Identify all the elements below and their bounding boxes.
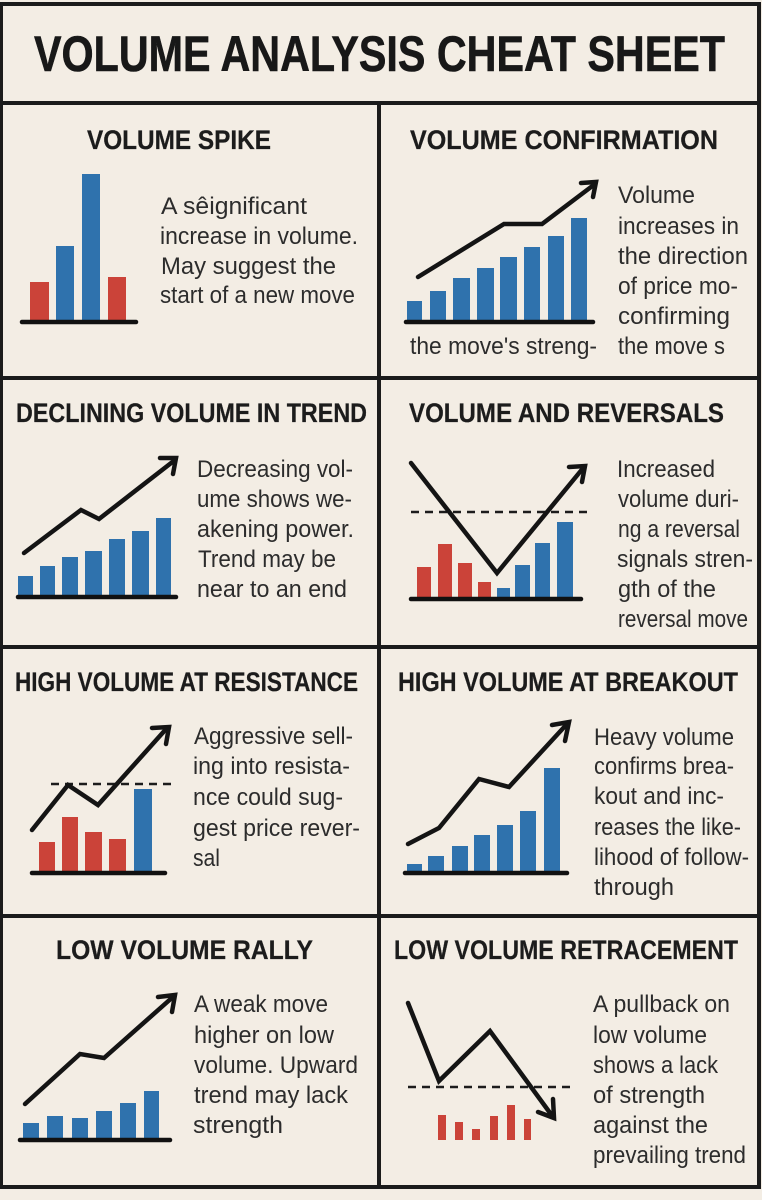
text: resistance description: sal: [193, 845, 220, 872]
text: reversals description: Increased: [617, 456, 715, 483]
text: volume spike description: increase in volume.: [160, 223, 358, 250]
text: retracement description: A pullback on: [593, 991, 730, 1018]
text: declining volume description: ume shows we-: [197, 486, 352, 513]
text: declining volume description: near to an end: [197, 576, 347, 603]
text: breakout description: confirms brea-: [594, 753, 734, 780]
panel: high volume at breakout: [379, 647, 759, 916]
text: low volume rally description: volume. Upward: [194, 1052, 358, 1079]
chart: low volume rally bars and price arrow: [20, 995, 175, 1140]
heading: declining volume in trend: DECLINING VOLUME IN TREND: [16, 398, 367, 428]
heading: volume and reversals: VOLUME AND REVERSALS: [409, 398, 724, 428]
panel: high volume at resistance: [1, 647, 379, 916]
text: volume confirmation description: [618, 182, 748, 360]
panel: volume and reversals: [379, 378, 759, 647]
heading: low volume rally: LOW VOLUME RALLY: [56, 935, 313, 965]
text: resistance description: ing into resista-: [193, 753, 350, 780]
chart: breakout bars and price arrow: [405, 722, 569, 873]
text: volume confirmation description: the direction: [618, 243, 748, 270]
panel: low volume retracement: [379, 916, 759, 1187]
text: volume confirmation description: increases in: [618, 213, 739, 240]
text: breakout description: [594, 724, 749, 901]
chart: declining volume bars and price arrow: [18, 458, 176, 597]
text: volume confirmation description: of price mo-: [618, 273, 738, 300]
text: volume spike description: A sêignificant: [161, 193, 307, 220]
panel: declining volume in trend: [1, 378, 379, 647]
text: volume confirmation description: Volume: [618, 182, 695, 209]
heading: high volume at resistance: HIGH VOLUME AT RESISTANCE: [15, 667, 358, 697]
text: volume spike description: start of a new move: [160, 282, 355, 309]
text: declining volume description: akening power.: [197, 516, 354, 543]
text: low volume rally description: A weak move: [194, 991, 328, 1018]
text: low volume rally description: [193, 991, 358, 1139]
text: low volume rally description: higher on low: [194, 1022, 335, 1049]
text: breakout description: through: [594, 874, 674, 901]
panel: volume confirmation: [379, 103, 759, 378]
text: reversals description: [617, 456, 753, 633]
text: volume spike description: May suggest the: [161, 253, 336, 280]
text: declining volume description: [197, 456, 354, 603]
text: breakout description: Heavy volume: [594, 724, 734, 751]
text: reversals description: ng a reversal: [618, 516, 740, 543]
text: resistance description: Aggressive sell-: [194, 723, 353, 750]
title banner: [1, 4, 759, 103]
text: volume confirmation description: the move s: [618, 333, 725, 360]
text: breakout description: reases the like-: [594, 814, 741, 841]
text: retracement description: prevailing trend: [593, 1142, 746, 1169]
text: retracement description: low volume: [593, 1022, 707, 1049]
heading: volume confirmation: VOLUME CONFIRMATION: [410, 125, 718, 155]
chart: reversal bars, level and V arrow: [411, 463, 590, 599]
text: resistance description: nce could sug-: [193, 784, 343, 811]
text: retracement description: [593, 991, 746, 1169]
chart: resistance bars, level and price arrow: [32, 727, 177, 873]
text: breakout description: kout and inc-: [594, 783, 724, 810]
text: retracement description: of strength: [593, 1082, 705, 1109]
text: retracement description: against the: [593, 1112, 708, 1139]
text: caption under chart: the move's streng-: [410, 333, 597, 360]
panel: low volume rally: [1, 916, 379, 1187]
text: retracement description: shows a lack: [593, 1052, 719, 1079]
text: declining volume description: Trend may be: [198, 546, 336, 573]
text: breakout description: lihood of follow-: [594, 844, 749, 871]
text: volume confirmation description: confirming: [618, 303, 730, 330]
chart: volume spike bars: [22, 174, 136, 322]
text: reversals description: gth of the: [618, 576, 716, 603]
chart: volume confirmation bars and price arrow: [406, 182, 596, 322]
heading: volume spike: VOLUME SPIKE: [87, 125, 271, 155]
text: resistance description: [193, 723, 360, 872]
text: declining volume description: Decreasing vol-: [197, 456, 353, 483]
panel: volume spike: [1, 103, 379, 378]
chart: retracement bars, level and falling arrow: [408, 1003, 570, 1140]
text: resistance description: gest price rever-: [193, 815, 360, 842]
text: low volume rally description: strength: [193, 1112, 283, 1139]
text: low volume rally description: trend may lack: [194, 1082, 349, 1109]
text: reversals description: volume duri-: [618, 486, 739, 513]
text: reversals description: signals stren-: [617, 546, 753, 573]
text: volume spike description: [160, 193, 358, 309]
